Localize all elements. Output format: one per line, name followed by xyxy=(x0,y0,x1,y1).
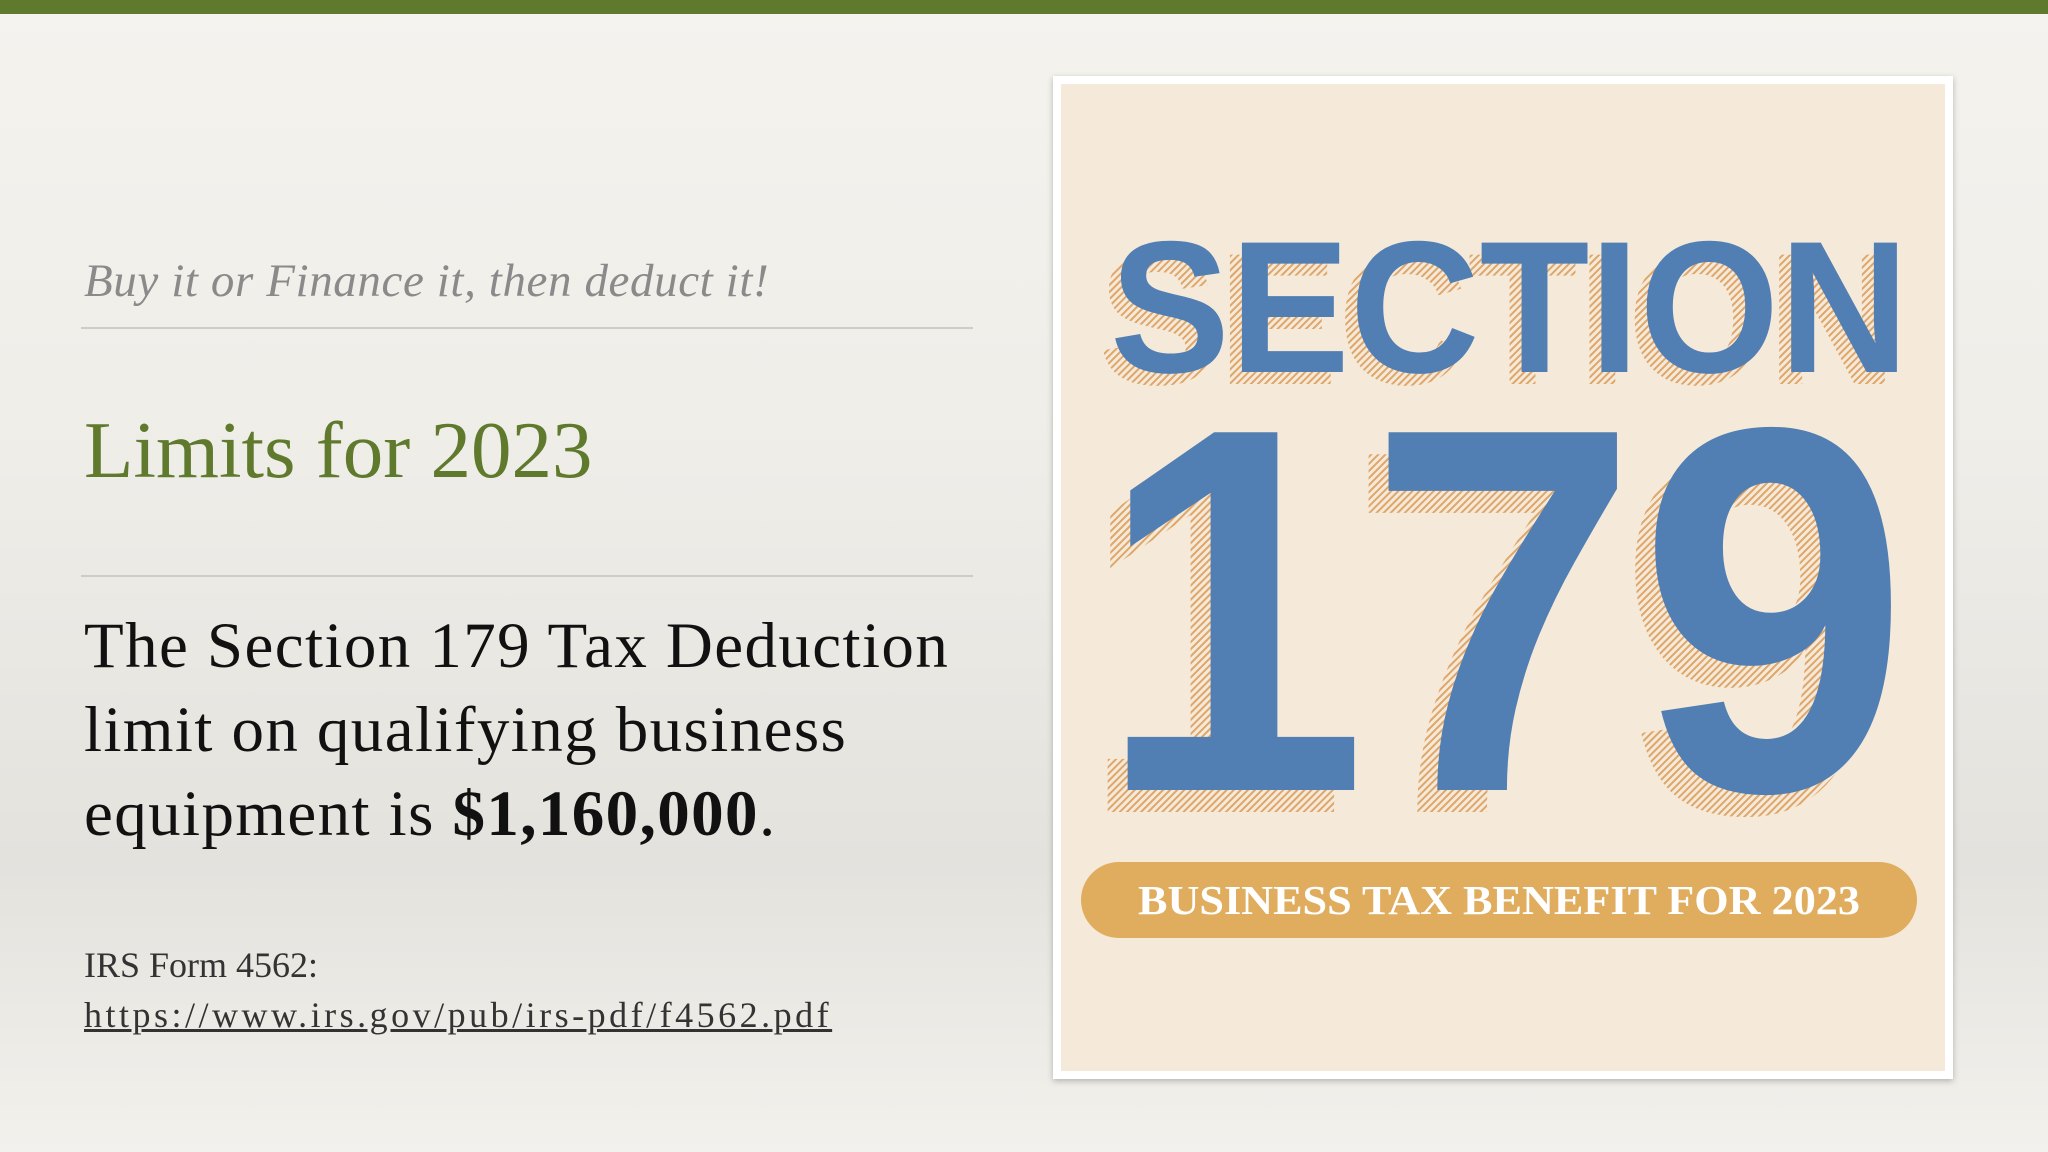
badge xyxy=(1081,862,1917,938)
body text xyxy=(84,610,949,850)
source note: IRS Form 4562: xyxy=(84,945,318,985)
title: SECTION: SECTION xyxy=(1098,214,1897,424)
subtitle: Buy it or Finance it, then deduct it! xyxy=(84,255,769,307)
panel: section 179 poster xyxy=(1053,76,1953,1079)
body text: equipment is $1,160,000. xyxy=(84,778,777,850)
number: 179: 179 xyxy=(1077,342,1889,923)
top green bar xyxy=(0,0,2048,14)
source note: https://www.irs.gov/pub/irs-pdf/f4562.pdf xyxy=(84,995,832,1035)
body text: The Section 179 Tax Deduction xyxy=(84,610,949,682)
title: SECTION: SECTION xyxy=(1110,202,1909,412)
source note xyxy=(84,945,832,1035)
body text: limit on qualifying business xyxy=(84,694,847,766)
heading: Limits for 2023 xyxy=(84,405,592,495)
number: 179: 179 xyxy=(1097,320,1909,901)
badge: BUSINESS TAX BENEFIT FOR 2023 xyxy=(1138,877,1860,923)
